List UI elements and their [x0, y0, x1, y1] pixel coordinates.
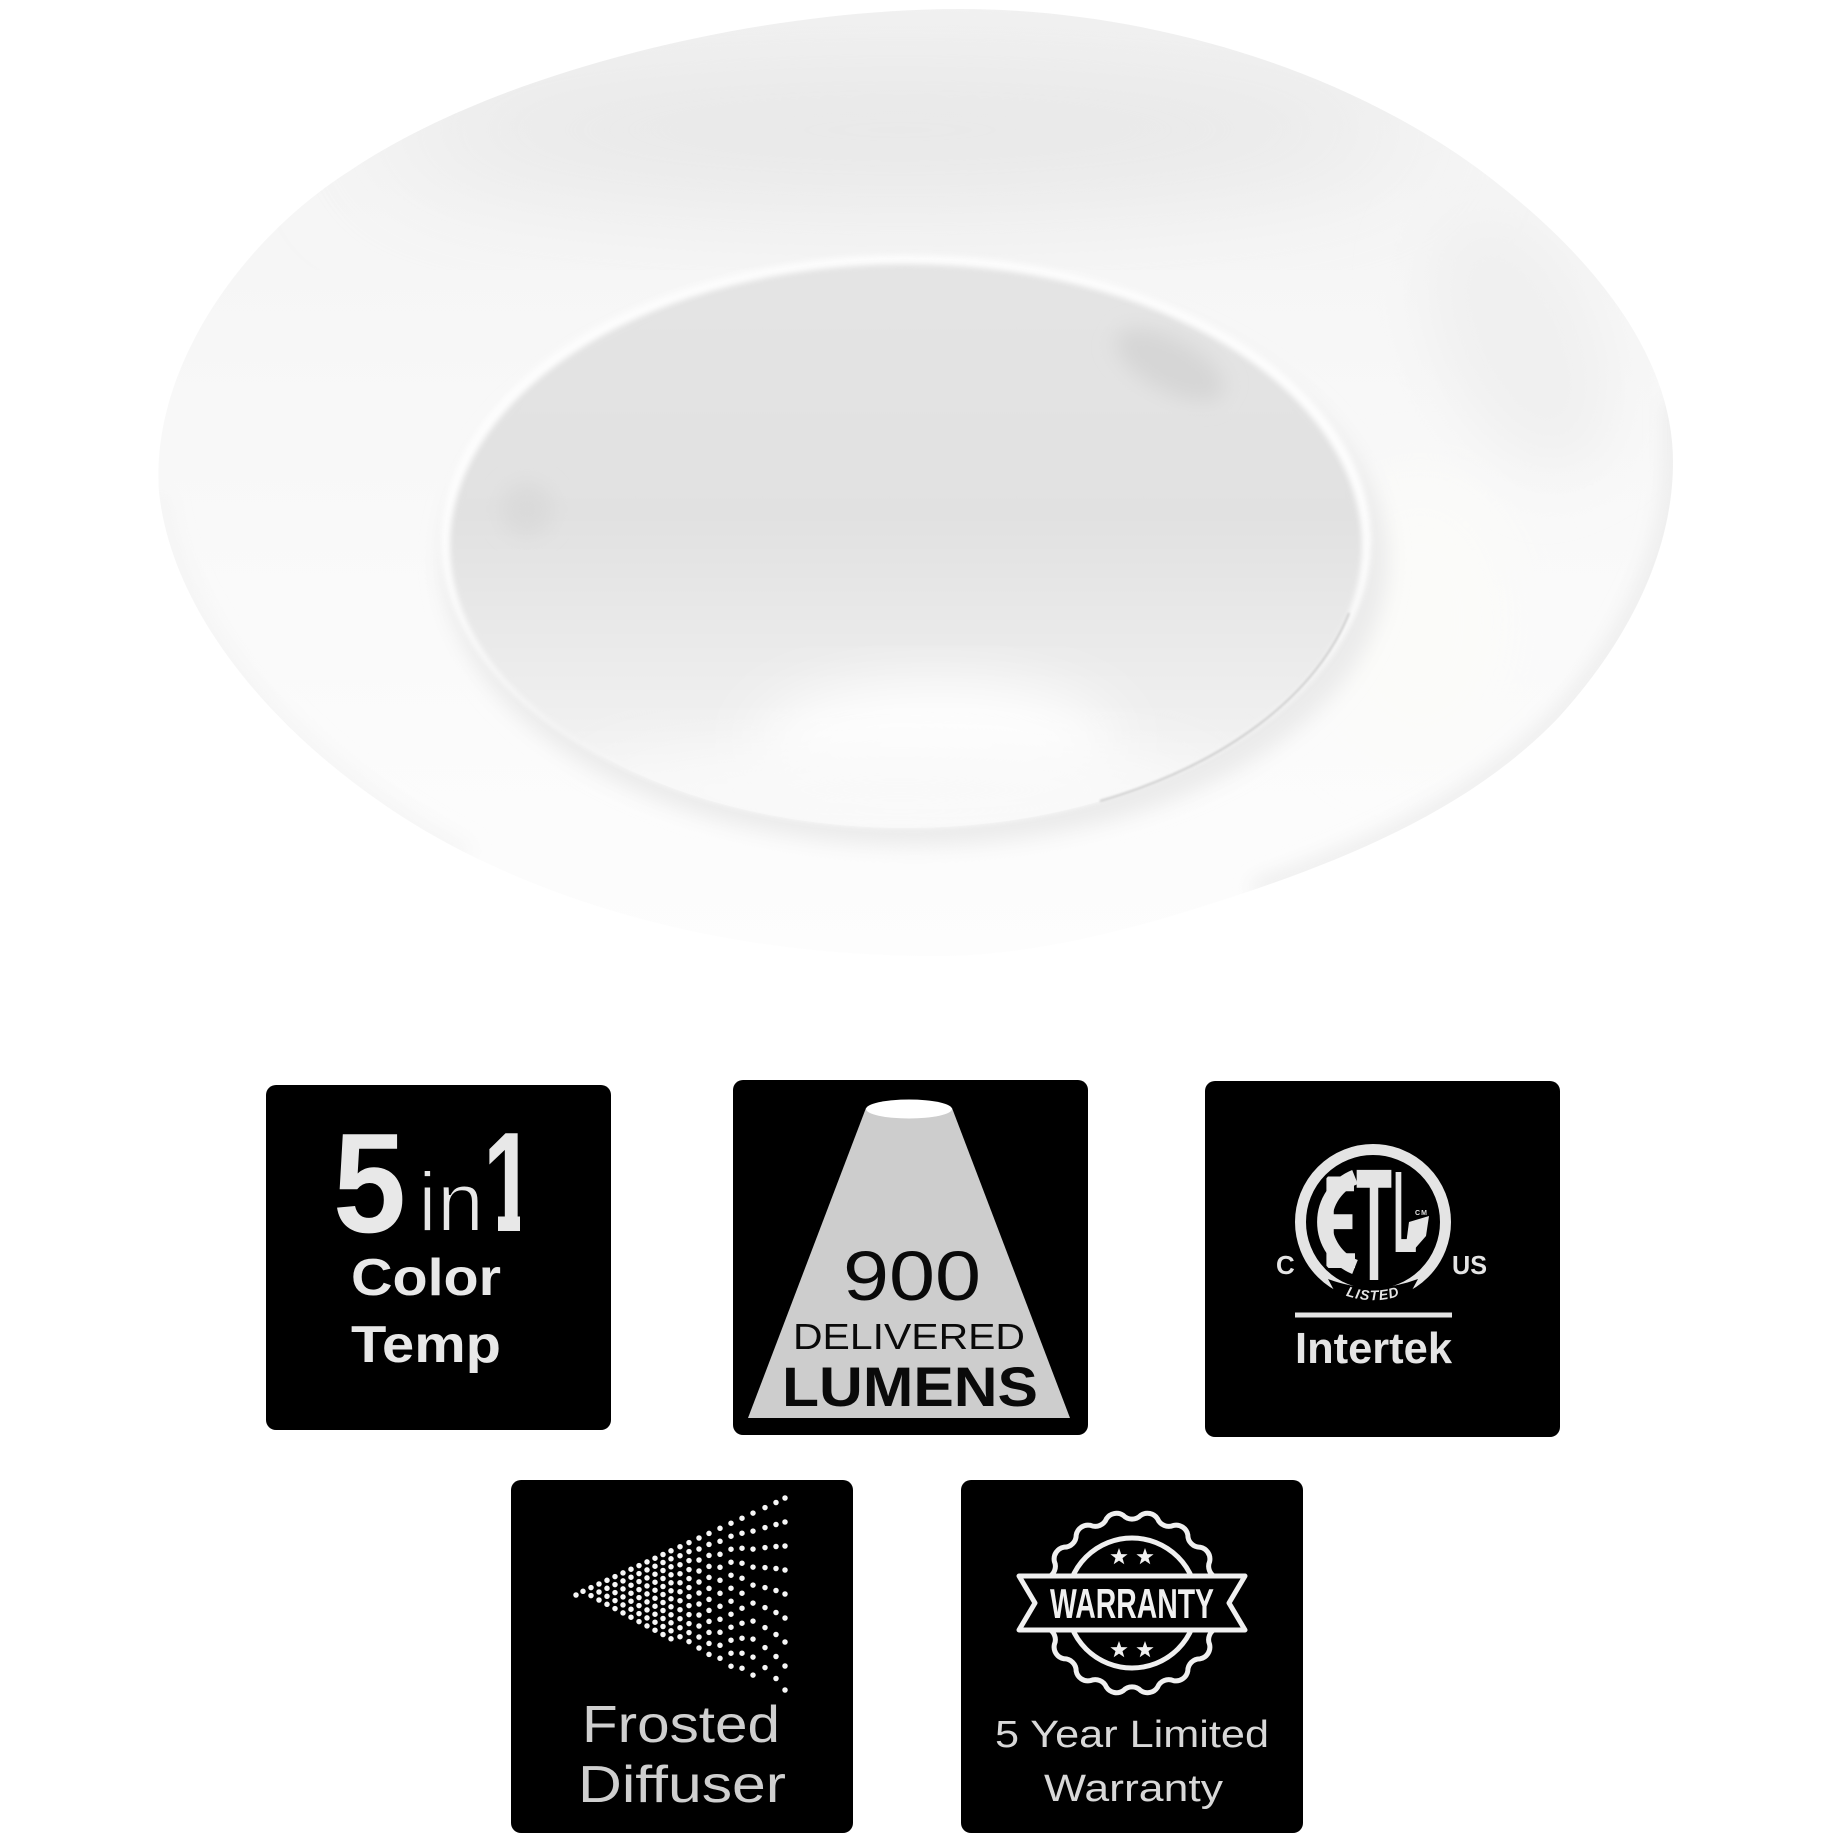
- text: 900 delivered lumens: 900: [843, 1237, 981, 1315]
- text: 5 Year Limited Warranty: Warranty: [1044, 1768, 1223, 1810]
- icon: light beam: [748, 1100, 1070, 1418]
- heading: 5in1: [337, 1133, 520, 1234]
- text: Color Temp: Temp: [351, 1316, 501, 1374]
- text: 5 Year Limited Warranty: [995, 1714, 1269, 1810]
- lamp trim body: [150, 0, 1680, 960]
- heading: 5in1: in: [418, 1155, 484, 1249]
- icon: warranty badge: [1019, 1504, 1245, 1702]
- heading: 5in1: 1: [483, 1103, 535, 1262]
- icon: ETL listed mark: LISTED: [1346, 1287, 1398, 1300]
- icon: ETL listed mark: T: [1356, 1135, 1392, 1314]
- lamp rim: [441, 255, 1371, 825]
- panel: 5 in 1 color temp: [266, 1085, 611, 1430]
- icon: ETL listed mark: [1276, 1144, 1487, 1318]
- icon: ETL listed mark: L: [1393, 1147, 1417, 1277]
- panel: ETL listed Intertek: [1205, 1081, 1560, 1437]
- icon: diffuser spray dots: [576, 1498, 785, 1693]
- text: 5 Year Limited Warranty: 5 Year Limited: [995, 1714, 1269, 1756]
- icon: ETL listed mark: US: [1452, 1250, 1487, 1280]
- text: 900 delivered lumens: DELIVERED: [793, 1316, 1025, 1357]
- text: 900 delivered lumens: [782, 1237, 1038, 1418]
- text: Color Temp: Color: [351, 1249, 501, 1307]
- icon: ETL listed mark: E: [1323, 1149, 1357, 1297]
- text: Frosted Diffuser: Diffuser: [578, 1756, 786, 1814]
- product photo: round LED disk light: [150, 0, 1680, 960]
- icon: ETL listed mark: C: [1276, 1250, 1295, 1280]
- text: Intertek: Intertek: [1295, 1324, 1453, 1373]
- icon: warranty badge: WARRANTY: [1050, 1580, 1214, 1627]
- panel: frosted diffuser: [511, 1480, 853, 1833]
- icon: ETL listed mark: CM: [1415, 1210, 1427, 1217]
- text: Color Temp: [351, 1249, 501, 1374]
- panel: 5 year limited warranty: [961, 1480, 1303, 1833]
- text: Frosted Diffuser: [578, 1696, 786, 1814]
- panel: 900 delivered lumens: [733, 1080, 1088, 1435]
- frosted lens: [450, 264, 1362, 840]
- heading: 5in1: 5: [333, 1104, 406, 1263]
- text: Frosted Diffuser: Frosted: [582, 1696, 780, 1754]
- text: 900 delivered lumens: LUMENS: [782, 1355, 1038, 1418]
